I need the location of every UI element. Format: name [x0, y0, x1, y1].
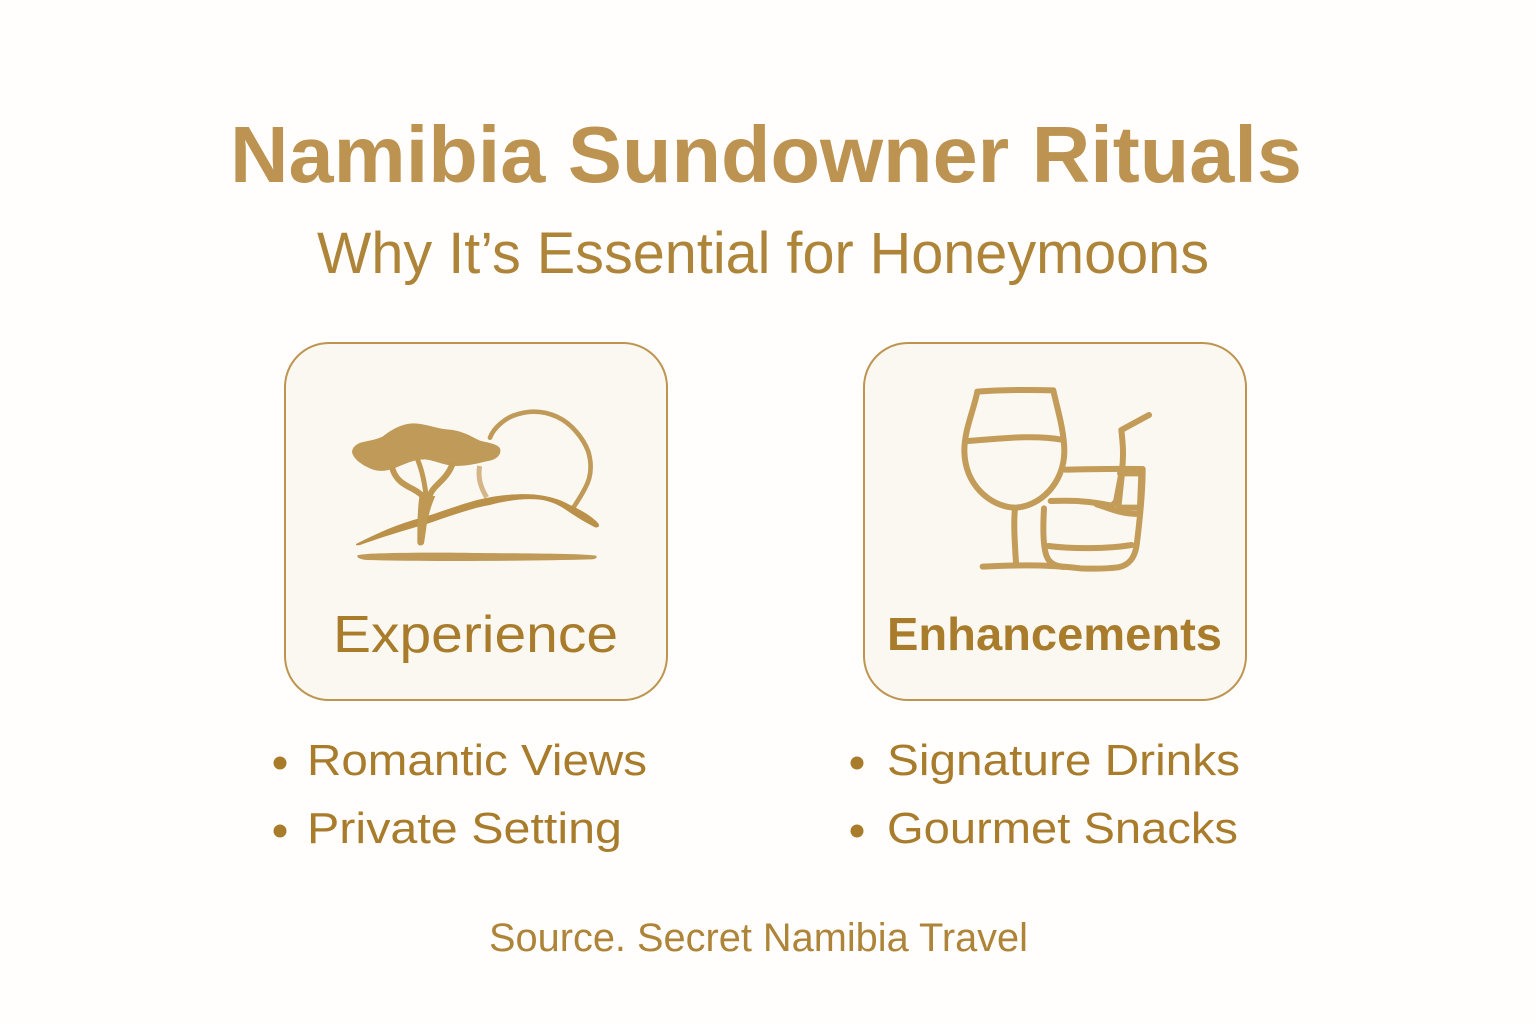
- source: Source. Secret Namibia Travel: [489, 916, 1028, 960]
- list: enhancements: [850, 736, 1240, 853]
- bullet: private setting: Private Setting: [307, 804, 622, 853]
- title: Namibia Sundowner Rituals: [230, 110, 1302, 199]
- panel: experience: [285, 343, 667, 700]
- subtitle: Why It’s Essential for Honeymoons: [317, 221, 1209, 286]
- list: experience: [274, 736, 647, 853]
- icon: acacia tree, sun and hill: [352, 412, 599, 561]
- bullet: signature drinks: Signature Drinks: [887, 736, 1240, 785]
- bullet: gourmet snacks: Gourmet Snacks: [887, 804, 1238, 853]
- card: enhancements: [864, 343, 1246, 700]
- icon: wine glass and tumbler: [964, 390, 1149, 569]
- panel: enhancements: [864, 343, 1246, 700]
- card: experience: [285, 343, 667, 700]
- bullet: romantic views: Romantic Views: [307, 736, 647, 785]
- label: enhancements: Enhancements: [887, 608, 1222, 660]
- label: experience: Experience: [333, 606, 618, 664]
